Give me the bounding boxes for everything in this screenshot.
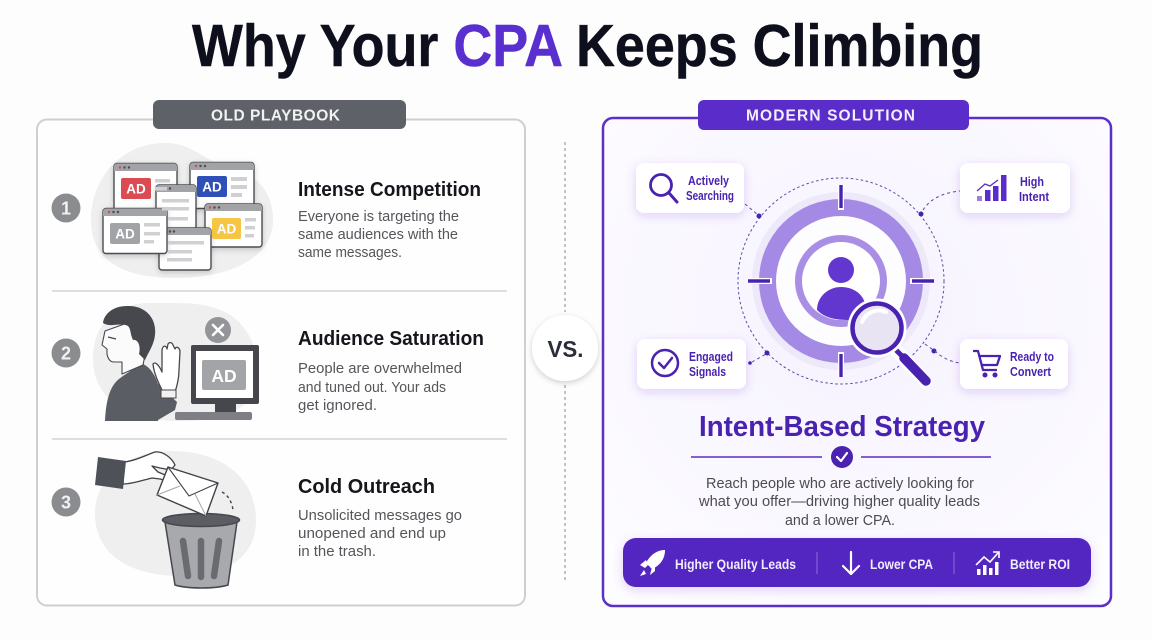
text: intense competition: Intense Competition (298, 179, 481, 201)
illustration: overlapping ad windows: AD (126, 182, 146, 196)
text: intense competition: Everyone is targeting the (298, 209, 459, 225)
card: high intent: Intent (1019, 190, 1050, 204)
heading: old playbook (153, 100, 406, 129)
description (698, 476, 980, 529)
vs badge: VS. (548, 336, 584, 362)
text: cold outreach (298, 476, 462, 560)
illustration: overlapping ad windows: AD (115, 226, 135, 242)
text: audience saturation: Audience Saturation (298, 328, 484, 350)
illustration: person blocking ad (93, 303, 259, 421)
icon: growth chart (976, 552, 999, 575)
card: actively searching: Actively (688, 174, 729, 188)
heading: intent-based strategy: Intent-Based Strategy (699, 411, 985, 443)
text: cold outreach: in the trash. (298, 544, 376, 560)
illustration: overlapping ad windows (91, 143, 273, 278)
illustration: person blocking ad: AD (211, 366, 237, 386)
person face (102, 322, 147, 374)
description: and a lower CPA. (785, 513, 895, 529)
heading: modern solution (698, 100, 969, 130)
text: intense competition: same audiences with the (298, 227, 458, 243)
person body (105, 364, 177, 421)
number badge 1: 1 (61, 198, 71, 218)
text: audience saturation (298, 328, 484, 414)
number badge 3 (52, 488, 80, 516)
description: Reach people who are actively looking for (706, 476, 974, 492)
card: high intent (960, 163, 1070, 213)
card: actively searching: Searching (686, 189, 734, 203)
panel: old playbook (37, 100, 525, 606)
title: Why Your CPA Keeps Climbing (192, 13, 983, 79)
vs badge (532, 315, 598, 381)
illustration: envelope into trash (95, 451, 256, 588)
card: ready to convert: Convert (1010, 365, 1052, 379)
text: audience saturation: People are overwhelmed (298, 361, 462, 377)
icon: magnifying glass (848, 298, 926, 382)
raised hand (153, 343, 180, 392)
person hair (103, 306, 155, 360)
number badge 2: 2 (61, 344, 71, 364)
text: cold outreach: Cold Outreach (298, 476, 435, 498)
panel: modern solution (603, 100, 1111, 606)
card: actively searching (636, 163, 744, 213)
target diagram (738, 178, 960, 384)
card: engaged signals: Engaged (689, 350, 733, 364)
text: cold outreach: unopened and end up (298, 526, 446, 542)
text: audience saturation: and tuned out. Your ads (298, 380, 446, 396)
text: intense competition (298, 179, 481, 261)
number badge 3: 3 (61, 492, 71, 512)
heading: old playbook: OLD PLAYBOOK (211, 108, 341, 124)
card: engaged signals: Signals (689, 365, 726, 379)
benefits bar: Higher Quality Leads (675, 557, 796, 572)
description: what you offer—driving higher quality leads (698, 494, 980, 510)
text: cold outreach: Unsolicited messages go (298, 508, 462, 524)
icon: rocket (640, 550, 665, 576)
hand (123, 452, 175, 484)
text: intense competition: same messages. (298, 245, 402, 261)
card: ready to convert (960, 339, 1068, 389)
heading: modern solution: MODERN SOLUTION (746, 108, 915, 124)
divider with check (691, 446, 991, 468)
benefits bar (623, 538, 1091, 587)
illustration: overlapping ad windows: AD (217, 222, 236, 236)
icon: down arrow (843, 552, 859, 574)
connector dots (748, 212, 936, 365)
number badge 2 (52, 338, 80, 368)
number badge 1 (52, 194, 80, 222)
card: high intent: High (1020, 175, 1044, 189)
text: audience saturation: get ignored. (298, 398, 377, 414)
illustration: overlapping ad windows: AD (202, 180, 222, 194)
benefits bar: Better ROI (1010, 557, 1070, 572)
benefits bar: Lower CPA (870, 557, 933, 572)
card: engaged signals (637, 339, 746, 389)
card: ready to convert: Ready to (1010, 350, 1054, 364)
